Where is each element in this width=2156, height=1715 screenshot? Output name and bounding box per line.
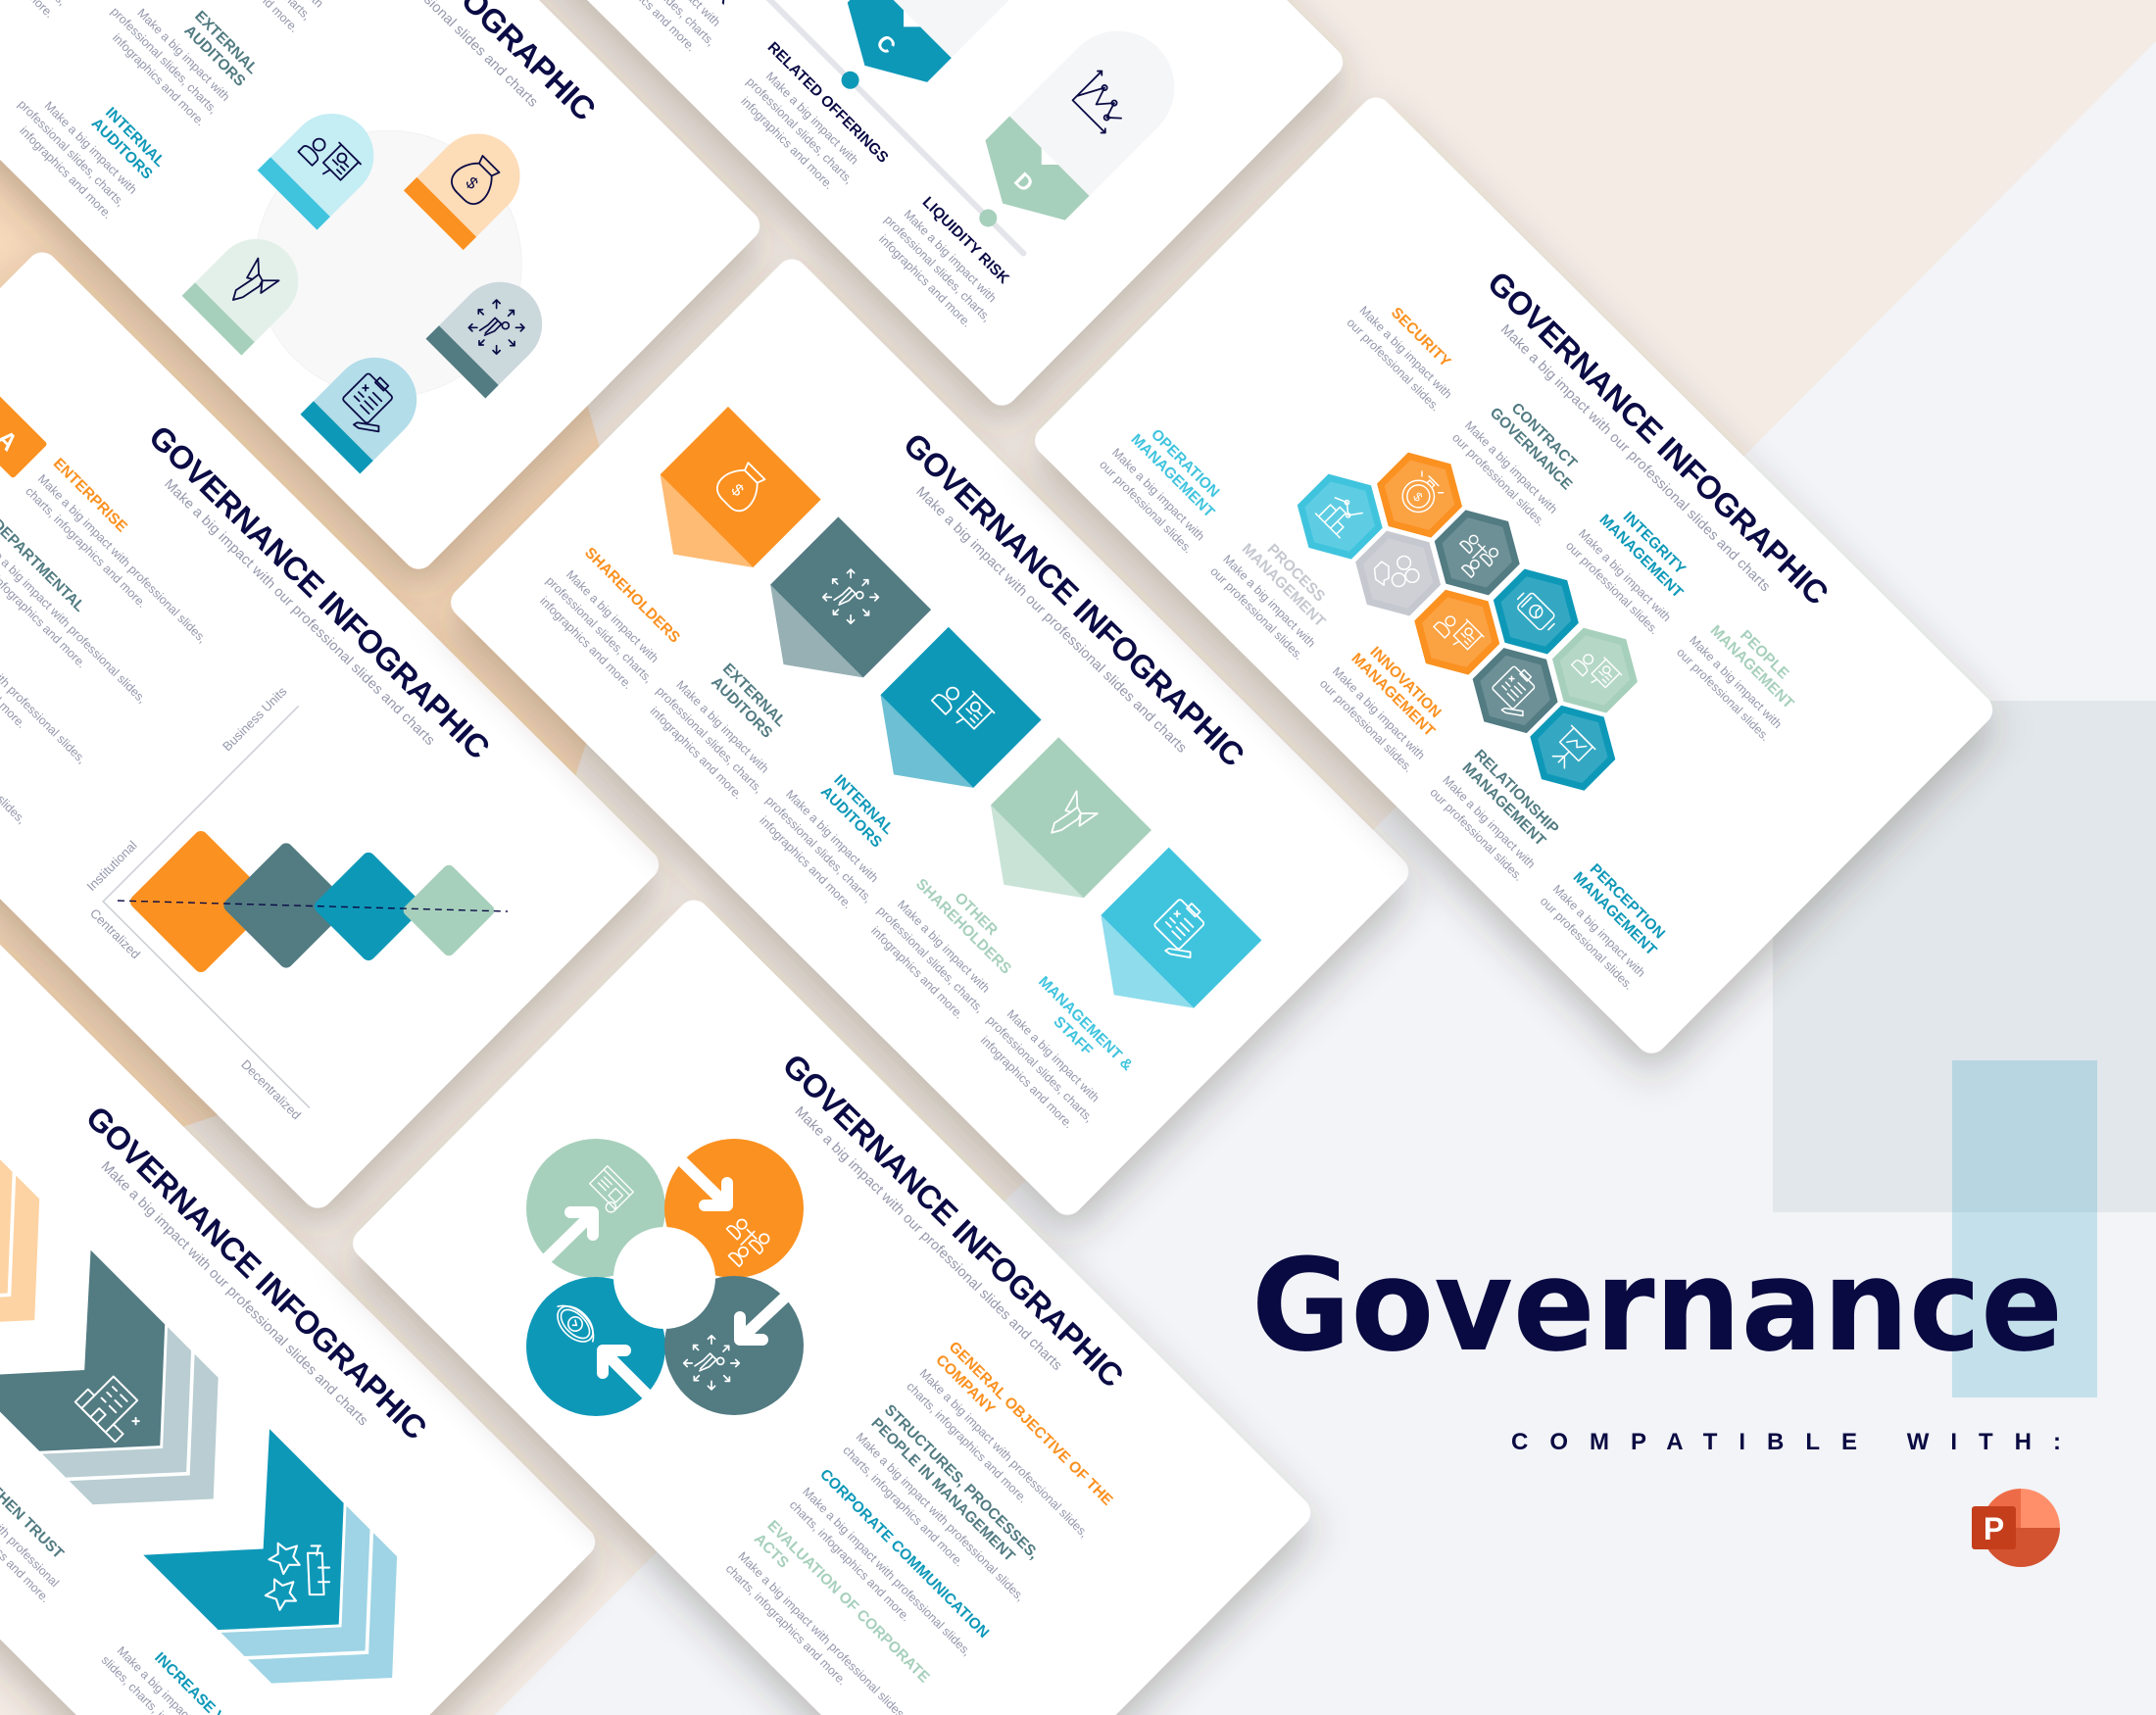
label: external auditors: infographics and more.	[110, 31, 208, 128]
label: related offerings	[724, 39, 892, 206]
label: security: SECURITY	[1388, 305, 1454, 370]
hexagon: orange presenter	[1398, 574, 1515, 691]
label: contract governance: Make a big impact with	[1462, 418, 1560, 516]
label: security: our professional slides.	[1345, 316, 1443, 414]
label: corporate communication: charts, infographics and more.	[787, 1498, 913, 1624]
label: people management: Make a big impact with	[1687, 633, 1785, 731]
label: relationship management	[1427, 743, 1568, 884]
label: external auditors	[96, 0, 261, 128]
hexagon: blue device	[1478, 554, 1594, 669]
label: contract governance: our professional slides.	[1449, 430, 1547, 529]
subtitle: Make a big impact with our professional slides and charts	[792, 1103, 1064, 1374]
label: shareholders: Make a big impact with	[564, 567, 662, 665]
label: enterprise: charts, infographics and more.	[23, 484, 149, 611]
axis label: centralized: Centralized	[87, 906, 143, 961]
label: internal auditors: infographics and more.	[17, 123, 115, 221]
label: management and staff: professional slides, charts,	[984, 1013, 1096, 1125]
label: process management: our professional slides.	[1207, 564, 1306, 662]
label: security: Make a big impact with	[1357, 304, 1454, 401]
label: general objective: COMPANY	[932, 1351, 999, 1418]
label: corporate communication: Make a big impact with professional slides,	[800, 1485, 974, 1659]
circle diagram	[526, 1139, 804, 1416]
label: liquidity risk: Make a big impact with	[901, 207, 999, 305]
label: relationship management: MANAGEMENT	[1459, 760, 1549, 850]
label: contract governance: CONTRACT	[1508, 400, 1581, 472]
label: related offerings: infographics and more.	[738, 94, 836, 192]
label: process management: Make a big impact with	[1220, 552, 1318, 650]
title: GOVERNANCE INFOGRAPHIC	[776, 1047, 1131, 1395]
label: structures: STRUCTURES, PROCESSES,	[881, 1401, 1042, 1563]
label: other shareholders: SHAREHOLDERS	[912, 876, 1014, 978]
icon: presentation app: P	[1984, 1511, 2004, 1546]
chevron: blue	[143, 1429, 455, 1715]
label: contract governance: GOVERNANCE	[1487, 405, 1575, 493]
label: external auditors: EXTERNAL	[191, 8, 261, 77]
label: management and staff: MANAGEMENT &	[1035, 973, 1136, 1074]
panel: timeline slide (top)	[379, 0, 1349, 412]
tile: blue clipboard	[301, 340, 434, 474]
label: management and staff: infographics and more.	[978, 1033, 1076, 1131]
label: innovation management: our professional slides.	[1317, 676, 1415, 775]
panel: four circles slide (bottom center)	[347, 894, 1317, 1715]
axis label: decentralized: Decentralized	[238, 1056, 304, 1122]
panel: arch tiles slide (top left)	[0, 0, 766, 575]
icon: presentation app	[1972, 1489, 2060, 1567]
tile C: C	[871, 29, 901, 59]
background: slate rectangle	[1773, 701, 2156, 1212]
label: structures	[840, 1401, 1056, 1617]
label: corporate communication: CORPORATE COMMUNICATION	[816, 1466, 992, 1642]
label: integrity management: our professional slides.	[1563, 539, 1661, 637]
label: contract governance	[1449, 385, 1593, 529]
label: internal auditors: Make a big impact with	[42, 99, 139, 197]
tile: mint tie	[182, 221, 316, 356]
label: shareholders	[530, 539, 690, 699]
label: perception management: Make a big impact with	[1550, 882, 1648, 980]
label: relationship management: our professional slides.	[1427, 785, 1526, 884]
label: evaluation: ACTS	[751, 1531, 792, 1572]
label: external auditors: infographics and more.	[648, 705, 745, 802]
chevron: orange	[0, 1071, 98, 1383]
tile: cyan presenter	[258, 96, 391, 230]
label: structures: charts, infographics and more.	[840, 1444, 966, 1569]
chevron: teal	[0, 1250, 276, 1562]
panel: five squares slide (center)	[445, 253, 1415, 1221]
label: external auditors: professional slides, charts,	[108, 5, 220, 117]
hexagon: orange stopwatch	[1361, 437, 1478, 554]
title: GOVERNANCE INFOGRAPHIC	[142, 418, 497, 766]
panel: diamond chart slide (left)	[0, 246, 665, 1214]
hexagon: cyan bars	[1282, 459, 1398, 574]
panel: chevron slide (bottom left)	[0, 923, 602, 1715]
label: internal auditors	[3, 57, 168, 221]
label: perception management: PERCEPTION	[1587, 860, 1668, 943]
label: external auditors: AUDITORS	[180, 23, 248, 90]
block: teal	[737, 516, 931, 710]
label: operation management: MANAGEMENT	[1128, 431, 1218, 521]
label: liquidity risk	[869, 183, 1022, 337]
label: process management: PROCESS	[1264, 541, 1328, 606]
label: strengthen trust	[0, 1422, 82, 1605]
label: related offerings: professional slides, charts,	[744, 74, 856, 186]
label: management and staff	[971, 966, 1143, 1138]
label: external auditors: EXTERNAL	[719, 661, 789, 730]
label: increase value	[99, 1624, 281, 1715]
label: integrity management: MANAGEMENT	[1596, 512, 1687, 602]
label: innovation management: Make a big impact with	[1330, 664, 1428, 762]
label: innovation management: INNOVATION	[1366, 644, 1445, 721]
label: innovation management	[1317, 634, 1457, 775]
label: operation management: OPERATION	[1148, 426, 1222, 501]
pale circle	[200, 75, 577, 453]
block: mint	[957, 737, 1152, 931]
label: management and staff: Make a big impact with	[1004, 1007, 1102, 1104]
main heading: Governance	[1251, 1231, 2063, 1380]
hexagon: blue board	[1514, 690, 1631, 807]
label: shareholders: professional slides, charts,	[543, 574, 655, 686]
label: internal auditors: professional slides, charts,	[763, 794, 875, 906]
label: internal auditors: AUDITORS	[817, 783, 885, 851]
label: evaluation: EVALUATION OF CORPORATE	[763, 1517, 933, 1686]
background: translucent blue rectangle	[1952, 1060, 2097, 1397]
label: other shareholders: Make a big impact with	[895, 898, 993, 996]
label: security	[1345, 287, 1471, 414]
hexagon: grey coins	[1340, 515, 1456, 631]
label: structures: Make a big impact with professional slides,	[854, 1430, 1027, 1604]
label: process management: MANAGEMENT	[1239, 541, 1329, 631]
label: internal auditors: infographics and more.	[757, 813, 855, 911]
label: evaluation: charts, infographics and more.	[723, 1562, 849, 1688]
label: perception management	[1538, 852, 1678, 993]
label: general objective: GENERAL OBJECTIVE OF THE	[946, 1339, 1115, 1509]
label: structures: PEOPLE IN MANAGEMENT	[867, 1415, 1018, 1565]
label: liquidity risk: professional slides, charts,	[882, 213, 994, 324]
compatibility label: COMPATIBLE WITH:	[1511, 1429, 2061, 1455]
chart axes	[103, 706, 505, 1108]
label: other shareholders: OTHER	[952, 890, 1001, 939]
label: left column text	[0, 0, 81, 21]
label: internal auditors: Make a big impact with	[783, 787, 881, 885]
axis label: business units: Business Units	[220, 683, 290, 754]
subtitle: Make a big impact with our professional slides and charts	[161, 476, 437, 749]
label: liquidity risk: infographics and more.	[876, 232, 974, 330]
block: orange	[627, 407, 821, 601]
label: liquidity risk: LIQUIDITY RISK	[919, 194, 1012, 288]
label: integrity management	[1563, 495, 1706, 637]
label: external auditors: Make a big impact with	[673, 678, 771, 776]
label: operation management: our professional slides.	[1097, 458, 1195, 556]
subtitle: Make a big impact with our professional slides and charts	[1497, 321, 1773, 595]
label: relationship management: Make a big impact with	[1440, 773, 1538, 871]
diamond chart	[118, 828, 508, 975]
badge A	[0, 373, 48, 479]
label: market risk	[593, 0, 747, 61]
label: external auditors: AUDITORS	[708, 674, 775, 742]
hexagon: teal org	[1419, 494, 1536, 611]
background: peach shape	[0, 0, 639, 1188]
tile D: D	[1009, 168, 1039, 197]
label: external auditors: professional slides, charts,	[654, 684, 765, 796]
label: perception management: our professional slides.	[1538, 895, 1636, 993]
tile C	[804, 0, 1059, 125]
label: innovation management: MANAGEMENT	[1348, 650, 1439, 740]
label: integrity management: Make a big impact with	[1576, 526, 1674, 624]
label: general objective	[904, 1337, 1120, 1553]
label: shareholders: infographics and more.	[537, 594, 635, 692]
block: cyan	[1067, 848, 1261, 1042]
block: blue	[848, 627, 1042, 821]
hexagon: mint presenter	[1537, 612, 1653, 728]
label: internal auditors: professional slides, charts,	[16, 97, 127, 209]
panel: hexagon slide (right)	[1029, 91, 1999, 1059]
label: general objective: charts, infographics and more.	[904, 1380, 1030, 1505]
label: other shareholders: professional slides, charts,	[874, 904, 986, 1015]
subtitle: Make a big impact with our professional slides and charts	[98, 1158, 370, 1429]
subtitle: Make a big impact with our professional slides and charts	[912, 484, 1190, 757]
tile: orange bag	[404, 117, 537, 250]
label: external auditors	[640, 638, 811, 808]
label: shareholders	[189, 0, 342, 35]
label: operation management: Make a big impact with	[1109, 446, 1207, 543]
label: other shareholders	[861, 858, 1033, 1029]
label: process management	[1207, 523, 1347, 662]
timeline line	[533, 0, 1028, 258]
label: internal auditors: INTERNAL	[102, 104, 168, 171]
hexagon: teal clipboard	[1457, 632, 1574, 749]
label: related offerings: Make a big impact with	[763, 70, 861, 168]
title: GOVERNANCE INFOGRAPHIC	[79, 1099, 434, 1446]
label: general objective: Make a big impact with professional slides,	[917, 1366, 1091, 1541]
tile: teal network	[425, 265, 560, 398]
tile D	[942, 8, 1198, 264]
label: perception management: MANAGEMENT	[1570, 869, 1660, 959]
label: other shareholders: infographics and more.	[868, 924, 966, 1022]
label: shareholders: SHAREHOLDERS	[581, 545, 683, 647]
label: evaluation	[722, 1517, 941, 1715]
label: management and staff: STAFF	[1050, 1013, 1096, 1059]
label: people management: our professional slides.	[1674, 646, 1772, 744]
label: internal auditors: INTERNAL	[830, 771, 897, 838]
label: people management	[1674, 604, 1814, 744]
label: related offerings: RELATED OFFERINGS	[764, 39, 892, 167]
label: people management: PEOPLE	[1737, 627, 1792, 682]
label: internal auditors	[750, 748, 920, 918]
label: external auditors: Make a big impact with	[134, 6, 232, 104]
title: GOVERNANCE INFOGRAPHIC	[897, 425, 1251, 773]
axis label: institutional: Institutional	[84, 838, 140, 894]
label: internal auditors: AUDITORS	[88, 115, 156, 183]
label: enterprise: ENTERPRISE	[50, 455, 130, 536]
label: relationship management: RELATIONSHIP	[1471, 747, 1562, 838]
label: enterprise: Make a big impact with professional slides,	[35, 471, 209, 646]
title: GOVERNANCE INFOGRAPHIC	[1481, 264, 1836, 612]
label: operation management	[1097, 416, 1238, 556]
label: people management: MANAGEMENT	[1707, 622, 1797, 712]
label: integrity management: INTEGRITY	[1620, 509, 1690, 578]
